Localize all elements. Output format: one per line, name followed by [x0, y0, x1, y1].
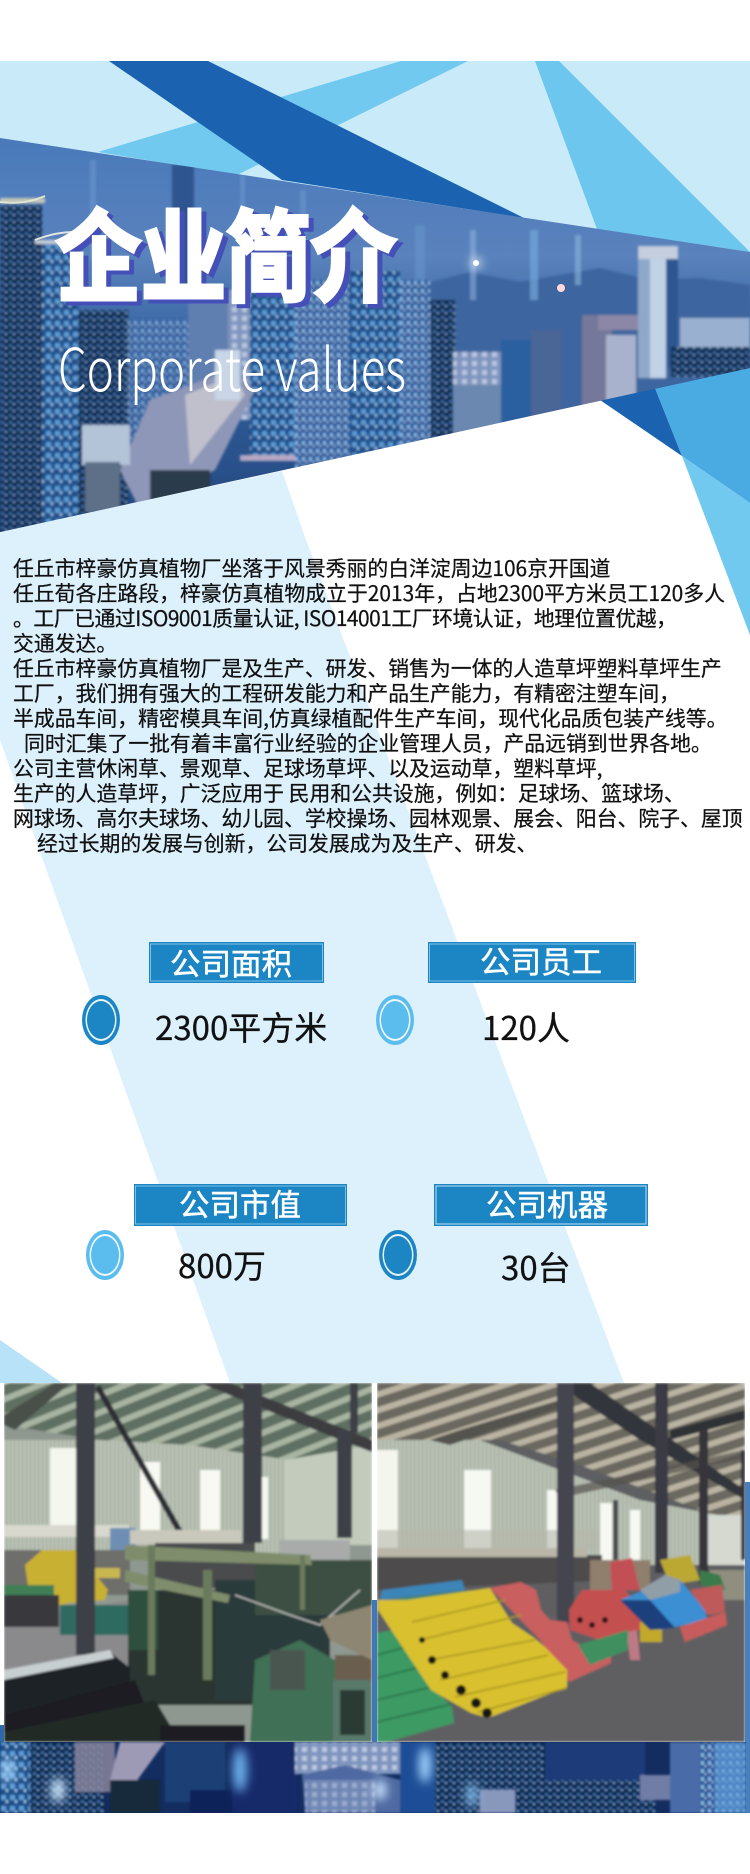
- title: 企业简介: 企业简介: [61, 182, 401, 326]
- company introduction text block: 任丘市梓豪仿真植物厂是及生产、研发、销售为一体的人造草坪塑料草坪生产: [13, 653, 722, 683]
- icon: light circle: [86, 1230, 124, 1280]
- heading: 公司员工: 公司员工: [480, 938, 602, 982]
- value: 120人: 120人: [482, 1002, 570, 1050]
- photo: warehouse with coloured rolls: [377, 1383, 745, 1742]
- heading: 公司市值: 公司市值: [179, 1181, 301, 1225]
- icon: dark circle: [379, 1230, 417, 1280]
- heading: 公司面积: 公司面积: [170, 940, 292, 984]
- icon: light circle: [376, 995, 414, 1045]
- company introduction text block: 半成品车间，精密模具车间,仿真绿植配件生产车间，现代化品质包装产线等。: [13, 703, 727, 733]
- company introduction text block: 同时汇集了一批有着丰富行业经验的企业管理人员，产品远销到世界各地。: [24, 728, 712, 758]
- company introduction text block: 任丘市梓豪仿真植物厂坐落于风景秀丽的白洋淀周边106京开国道: [13, 553, 611, 583]
- bottom city strip: [0, 1482, 750, 1813]
- title: 企业简介: 企业简介: [56, 178, 396, 322]
- company introduction text block: 。工厂已通过ISO9001质量认证, ISO14001工厂环境认证，地理位置优越，: [13, 603, 677, 633]
- company introduction text block: 经过长期的发展与创新，公司发展成为及生产、研发、: [37, 828, 537, 858]
- company introduction text block: 交通发达。: [13, 628, 117, 658]
- stat: company area: [82, 940, 327, 1050]
- heading: 公司面积: [149, 940, 324, 984]
- heading: 公司市值: [134, 1181, 347, 1226]
- subtitle: Corporate values: Corporate values: [58, 323, 406, 408]
- stat: company machines: [379, 1181, 648, 1290]
- stat: company market value: [86, 1181, 347, 1288]
- company introduction text block: 公司主营休闲草、景观草、足球场草坪、以及运动草，塑料草坪,: [13, 753, 602, 783]
- company introduction text block: 生产的人造草坪，广泛应用于 民用和公共设施，例如：足球场、篮球场、: [13, 778, 685, 808]
- heading: 公司员工: [428, 938, 636, 983]
- company introduction text block: 网球场、高尔夫球场、幼儿园、学校操场、园林观景、展会、阳台、院子、屋顶: [13, 803, 743, 833]
- photo: factory workshop machinery: [4, 1383, 372, 1742]
- value: 800万: 800万: [178, 1240, 266, 1288]
- heading: 公司机器: 公司机器: [486, 1181, 608, 1225]
- banner: night city skyline: [0, 130, 750, 540]
- icon: dark circle: [82, 995, 120, 1045]
- value: 2300平方米: 2300平方米: [155, 1002, 327, 1050]
- company introduction text block: 任丘荀各庄路段，梓豪仿真植物成立于2013年，占地2300平方米员工120多人: [13, 578, 725, 608]
- company introduction text block: [13, 553, 743, 858]
- stat: company staff: [376, 938, 636, 1050]
- company introduction text block: 工厂，我们拥有强大的工程研发能力和产品生产能力，有精密注塑车间，: [13, 678, 680, 708]
- value: 30台: 30台: [501, 1242, 571, 1290]
- heading: 公司机器: [434, 1181, 648, 1226]
- background geometric shapes: [0, 61, 750, 1383]
